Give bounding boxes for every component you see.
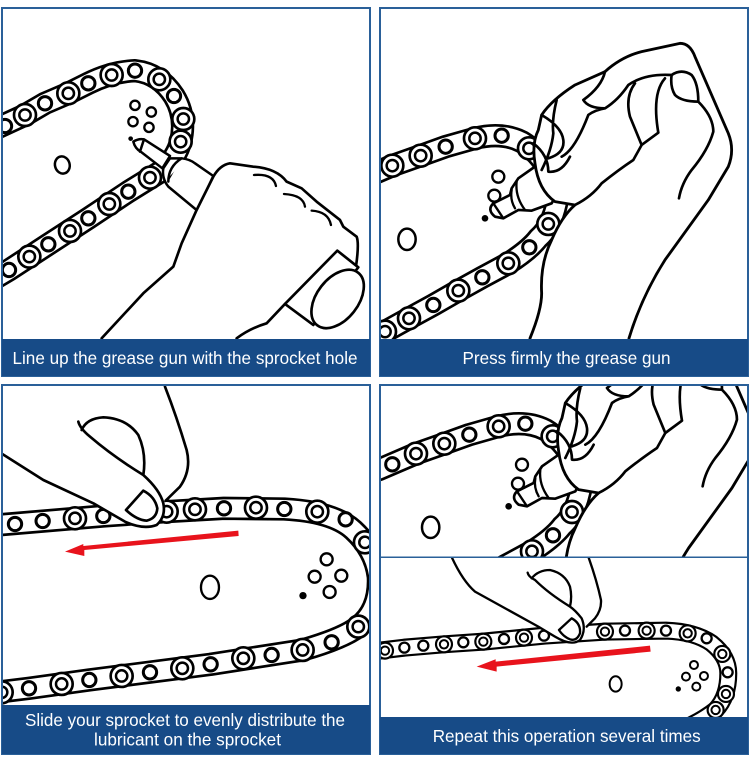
panel: slide the sprocket (0, 377, 378, 754)
illustration: sliding chain repeat with red arrow (368, 553, 734, 725)
panel: press firmly (355, 8, 748, 376)
caption banner: Repeat this operation several times (433, 726, 701, 746)
divider line between repeated steps (380, 556, 748, 558)
illustration: chain, grease gun and hand aligned to sprocket hole (0, 64, 374, 347)
illustration: hand pressing grease gun onto chain bar (355, 43, 732, 350)
caption banner: Slide your sprocket to evenly distribute the (25, 710, 345, 730)
caption banner: Line up the grease gun with the sprocket hole (12, 348, 358, 368)
illustration: pressing grease gun repeat (381, 386, 747, 556)
caption banner: lubricant on the sprocket (94, 730, 281, 750)
caption banner (2, 339, 370, 376)
illustration: fingers sliding chain with red arrow (0, 377, 378, 703)
caption banner (380, 717, 748, 754)
caption banner (380, 339, 748, 376)
panel: repeat the operation (379, 384, 749, 755)
caption banner: Press firmly the grease gun (462, 348, 670, 368)
caption banner (2, 705, 370, 754)
panel: line up the grease gun (0, 8, 374, 376)
